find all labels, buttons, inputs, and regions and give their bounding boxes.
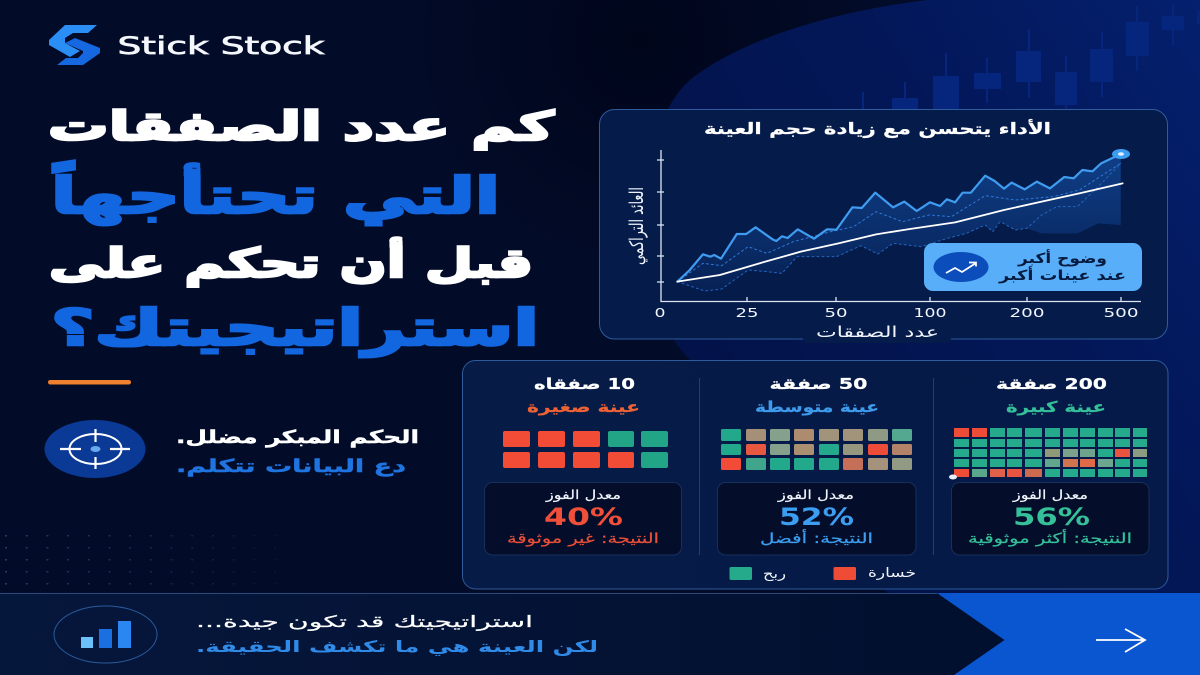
win rate card xyxy=(952,482,1149,555)
trade squares: 50 xyxy=(721,429,912,470)
column: medium sample xyxy=(718,375,916,555)
x axis tick labels: 25 xyxy=(736,305,758,320)
bottom banner xyxy=(0,593,1200,675)
blue arrow block xyxy=(937,593,1200,675)
column: large sample: عينة كبيرة xyxy=(1006,398,1106,416)
x axis tick labels: 500 xyxy=(1104,305,1139,320)
win rate card: معدل الفوز xyxy=(545,487,621,503)
legend: خسارة xyxy=(868,566,916,581)
trade squares: 10 xyxy=(503,431,668,468)
legend xyxy=(730,566,916,582)
icon: bars xyxy=(54,606,157,663)
banner text: استراتيجيتك قد تكون جيدة... xyxy=(196,612,533,632)
win rate card: 56% xyxy=(1013,503,1090,531)
win rate card: النتيجة: غير موثوقة xyxy=(507,531,659,547)
callout: وضوح أكبر xyxy=(1017,249,1107,267)
column: large sample: 200 صفقة xyxy=(996,375,1107,393)
headline: كم عدد الصفقات xyxy=(48,104,555,150)
series xyxy=(677,154,1123,291)
win rate card: 52% xyxy=(779,503,854,531)
callout: عند عينات أكبر xyxy=(998,266,1126,284)
column: medium sample: عينة متوسطة xyxy=(755,398,879,416)
headline: قبل أن تحكم على xyxy=(49,237,533,287)
icon: target xyxy=(44,420,146,478)
arrow xyxy=(1096,629,1145,652)
x axis label: عدد الصفقات xyxy=(816,323,939,341)
chart title: الأداء يتحسن مع زيادة حجم العينة xyxy=(704,119,1051,138)
win rate card: معدل الفوز xyxy=(777,487,854,503)
headline: التي تحتأجهاً xyxy=(51,160,500,226)
headline xyxy=(48,104,555,358)
note: early judgement: دع البيانات تتكلم. xyxy=(176,456,406,477)
icon: trend up xyxy=(934,252,988,282)
win rate card: 40% xyxy=(544,503,623,531)
brand name: Stick Stock xyxy=(118,32,325,60)
icon: S mark xyxy=(49,25,100,65)
x axis tick labels: 50 xyxy=(824,305,848,320)
headline: استراتيجيتك؟ xyxy=(51,299,539,358)
x axis tick labels: 100 xyxy=(914,305,947,320)
note text: الحكم المبكر مضلل. xyxy=(176,427,419,448)
win rate card xyxy=(718,482,916,555)
win rate card: النتيجة: أفضل xyxy=(760,529,873,547)
note: early judgement xyxy=(44,420,419,478)
trade squares: 200 xyxy=(954,428,1147,477)
callout xyxy=(924,243,1142,291)
x axis tick labels: 200 xyxy=(1010,305,1045,320)
legend: ربح xyxy=(763,567,786,582)
win rate card: النتيجة: أكثر موثوقية xyxy=(968,529,1132,547)
win rate card: معدل الفوز xyxy=(1012,487,1088,503)
x axis tick labels xyxy=(654,305,1139,320)
column: small sample: عينة صغيرة xyxy=(527,398,640,416)
background candlesticks xyxy=(862,4,1200,110)
column: small sample: 10 صفقاه xyxy=(534,375,635,393)
bottom banner: لكن العينة هي ما تكشف الحقيقة. xyxy=(196,637,598,657)
column: large sample xyxy=(949,375,1149,555)
logo xyxy=(49,25,325,65)
column: medium sample: 50 صفقة xyxy=(770,375,868,393)
accent divider xyxy=(48,380,131,384)
panel: line chart xyxy=(600,110,1168,343)
panel: sample comparison xyxy=(462,360,1168,589)
x axis tick labels: 0 xyxy=(654,305,666,320)
dot pattern xyxy=(5,535,296,584)
y axis label: العائد التراكمي xyxy=(626,187,648,265)
column: small sample xyxy=(484,375,682,555)
end point marker xyxy=(1112,149,1130,159)
axes xyxy=(657,150,1141,302)
win rate card xyxy=(484,482,682,555)
